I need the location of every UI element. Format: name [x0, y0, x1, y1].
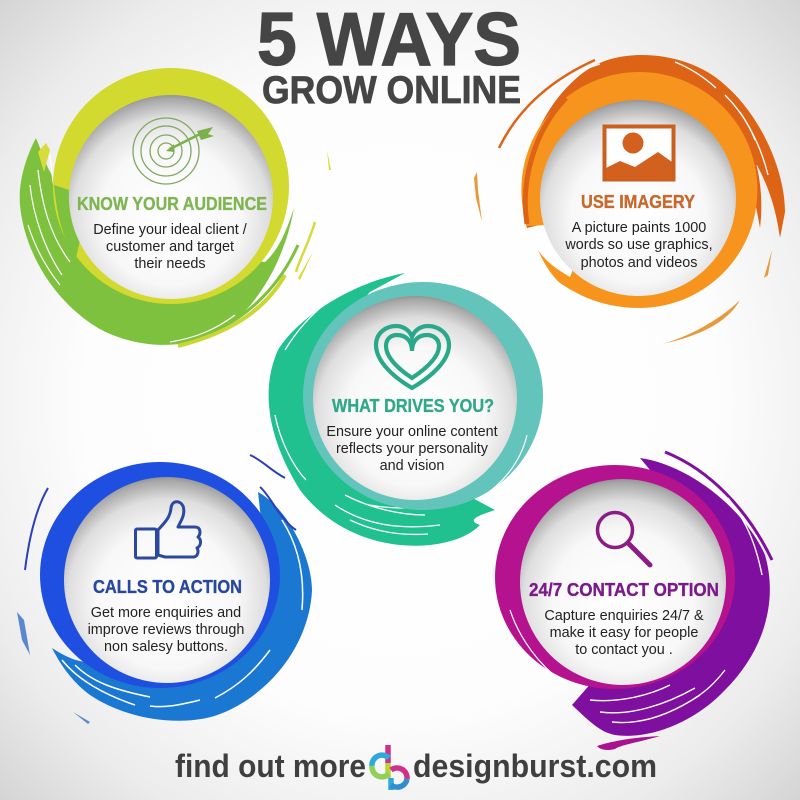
heading: WHAT DRIVES YOU? — [332, 396, 494, 416]
brush overlap on ring — [525, 98, 566, 224]
logo: designburst — [372, 745, 407, 790]
ring: orange — [521, 72, 757, 308]
footer: find out more: find out more — [175, 748, 366, 784]
heading: 24/7 CONTACT OPTION — [529, 580, 719, 600]
panel: what drives you — [269, 273, 543, 546]
body text — [544, 608, 704, 658]
circle well — [69, 95, 273, 299]
body text: Get more enquiries and — [91, 605, 241, 621]
brush stroke: blue — [17, 455, 312, 724]
circle well — [520, 479, 726, 685]
brush stroke: green — [20, 138, 331, 346]
heading: KNOW YOUR AUDIENCE — [77, 194, 267, 214]
icon: picture frame — [604, 126, 674, 180]
body text: reflects your personality — [336, 441, 489, 457]
body text: customer and target — [106, 239, 234, 255]
circle well — [64, 477, 270, 683]
ring: yellow — [53, 68, 289, 304]
brush stroke: orange — [474, 55, 785, 344]
ring: blue — [40, 462, 280, 688]
body text: photos and videos — [581, 255, 697, 271]
ring: magenta — [495, 465, 735, 689]
ring: teal — [303, 282, 543, 510]
body text: words so use graphics, — [564, 237, 713, 253]
panel: contact option — [495, 452, 772, 750]
panel: calls to action — [17, 455, 312, 724]
body text: and vision — [380, 458, 444, 474]
body text: their needs — [134, 256, 206, 272]
body text: Ensure your online content — [326, 424, 498, 440]
icon: thumbs up — [136, 502, 201, 558]
body text — [88, 605, 244, 655]
panel: use imagery — [474, 55, 785, 344]
icon: magnifying glass — [598, 512, 650, 565]
heading: USE IMAGERY — [581, 192, 695, 212]
body text: Capture enquiries 24/7 & — [544, 608, 704, 624]
body text: improve reviews through — [88, 622, 244, 638]
icon: heart — [376, 326, 449, 388]
footer: website: designburst.com — [413, 748, 657, 784]
title: GROW ONLINE — [262, 69, 521, 112]
body text — [564, 220, 713, 271]
heading: CALLS TO ACTION — [93, 577, 242, 597]
body text: Define your ideal client / — [93, 222, 247, 238]
body text: to contact you . — [575, 642, 673, 658]
brush overlap on ring — [54, 185, 80, 258]
circle well — [313, 296, 517, 500]
body text: non salesy buttons. — [104, 639, 228, 655]
body text: make it easy for people — [550, 625, 698, 641]
body text — [326, 424, 498, 474]
brush stroke: green-teal — [269, 273, 495, 546]
icon: target with arrow — [133, 118, 214, 184]
title — [257, 0, 521, 112]
body text: A picture paints 1000 — [572, 220, 706, 236]
circle well — [540, 100, 736, 296]
brush stroke: purple — [572, 452, 772, 750]
body text — [93, 222, 247, 272]
panel: know your audience — [20, 68, 331, 346]
